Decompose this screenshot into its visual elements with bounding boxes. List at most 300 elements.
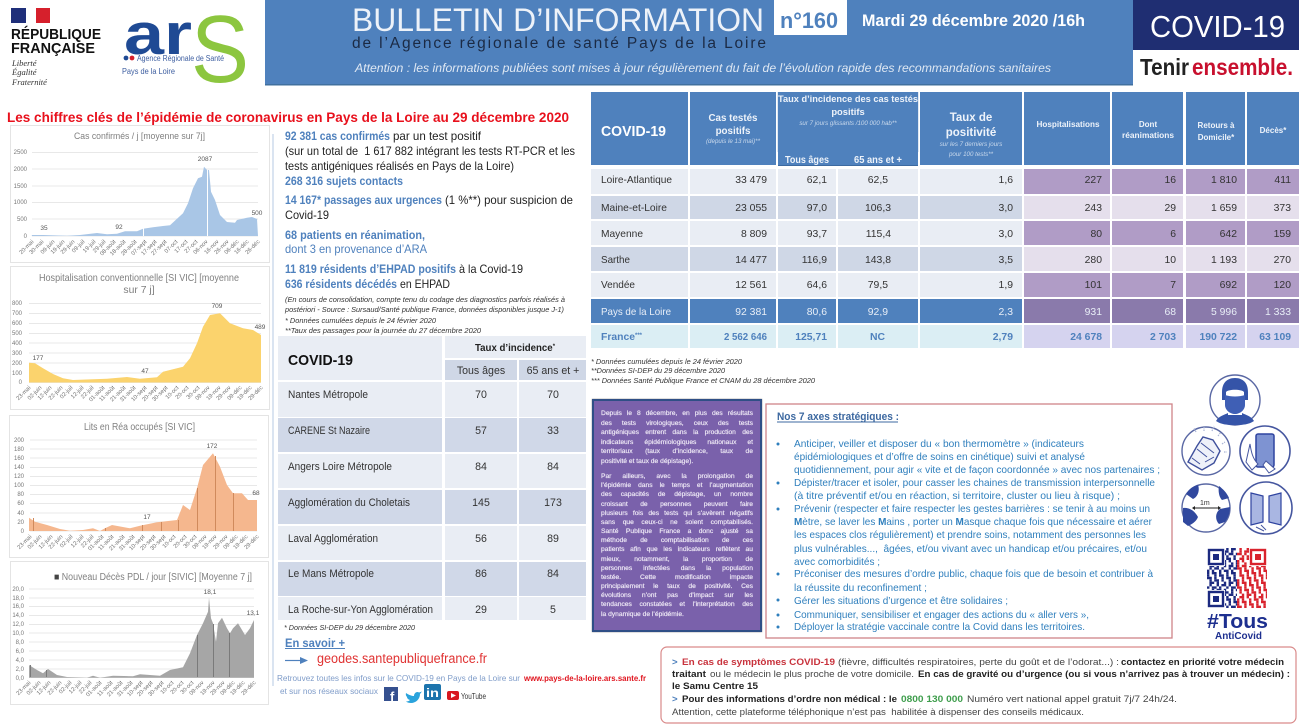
table header: positifs: [831, 106, 865, 117]
row: Mayenne: 8 809: [741, 229, 767, 240]
label: #TousAntiCovid: #Tous: [1207, 611, 1268, 633]
chart: lits en réa occupés: 02-juin: [27, 534, 43, 551]
icon: masque: [1210, 375, 1260, 425]
chart: lits en réa occupés: 200: [14, 438, 25, 444]
key figures text block: (1 %**) pour suspicion de: [445, 194, 573, 207]
chart: nouveaux décès: 0,0: [16, 676, 25, 682]
table: taux d'incidence par agglomération: 5: [550, 604, 556, 616]
chart: hospitalisation conventionnelle: 23-mai: [16, 385, 32, 402]
icon: téléphone: [1240, 426, 1290, 476]
chart: hospitalisation conventionnelle: 22-juin: [48, 385, 64, 402]
icons: réseaux sociaux: YouTube: [461, 691, 486, 701]
chart: nouveaux décès: 18,1: [204, 589, 217, 596]
chart: nouveaux décès: 10,0: [12, 631, 25, 637]
chart: lits en réa occupés: 20-sept: [139, 534, 158, 552]
header banner: BULLETIN D’INFORMATION: [352, 2, 764, 38]
table: taux d'incidence par agglomération: 65 ans et +: [527, 365, 579, 377]
table: taux d'incidence par agglomération: 145: [472, 497, 490, 509]
chart: hospitalisation conventionnelle: 10-oct: [165, 385, 181, 401]
row: Pays de la Loire: 2,3: [999, 307, 1013, 318]
table: taux d'incidence par agglomération: [278, 336, 586, 620]
row: Mayenne: 115,4: [866, 229, 891, 240]
chart: lits en réa occupés: 22-juil: [80, 534, 95, 549]
chart: hospitalisation conventionnelle: 22-juil: [80, 385, 95, 400]
row: Vendée: 101: [1085, 280, 1102, 291]
chart: nouveaux décès: 14,0: [12, 613, 25, 619]
chart: lits en réa occupés: 30-sept: [149, 534, 168, 552]
row: France: France: [601, 332, 635, 343]
chart: cas confirmés: 06-déc: [224, 239, 240, 256]
logo: République Française: [11, 8, 101, 87]
row: Sarthe: 143,8: [865, 255, 891, 266]
panel: note méthodologique violette: des tests virologiques, ceux des tests: [601, 420, 753, 426]
table: taux d'incidence par agglomération: Tous âges: [457, 365, 505, 377]
chart: cas confirmés: 500: [17, 217, 28, 223]
bullet list: Mètre, se laver les Mains , porter un Masque chaque fois que nécessaire et aérer: [794, 517, 1153, 528]
bullet list: (à titre préventif et/ou en réaction, si territoire, cluster ou lieu à risque) ;: [794, 491, 1120, 502]
chart: cas confirmés: 1000: [14, 200, 28, 206]
chart: nouveaux décès: 09-nov: [189, 680, 205, 697]
row: France: 190 722: [1199, 332, 1237, 343]
chart: lits en réa occupés: 22-juin: [48, 534, 64, 551]
row: Vendée: [601, 280, 1291, 291]
chart: hospitalisation conventionnelle: 11-août: [99, 385, 117, 403]
chart: nouveaux décès: 22-juin: [47, 680, 63, 697]
social links line: [277, 674, 646, 696]
panel: note méthodologique violette: croissant de personnes peuvent faire: [601, 500, 753, 508]
bullet list: [776, 439, 1160, 633]
chart: nouveaux décès: 22-juil: [78, 680, 93, 695]
table header: [591, 92, 1299, 166]
icon: distance 1 m: [1182, 484, 1230, 532]
chart: lits en réa occupés: 31-août: [118, 534, 137, 552]
table: taux d'incidence par agglomération: 84: [475, 461, 487, 473]
bullet list: la réussite du reconfinement ;: [794, 583, 927, 594]
key figures text block: (En cours de consolidation, compte tenu du codage des diagnostics parfois réalisés à: [285, 295, 565, 304]
logo: ARS Pays de la Loire: ar: [124, 2, 192, 67]
chart: lits en réa occupés: 160: [14, 456, 25, 462]
chart: lits en réa occupés: 30-oct: [183, 534, 199, 550]
header banner: [265, 0, 1133, 86]
row: Loire-Atlantique: 62,1: [807, 175, 827, 186]
panel: note méthodologique violette: Depuis le 8 décembre, en plus des résultats: [601, 410, 753, 417]
chart: cas confirmés: 2500: [14, 150, 28, 156]
table header: COVID-19: [601, 124, 666, 140]
chart: cas confirmés: 500: [252, 210, 263, 217]
panel: note méthodologique violette: sans que ceux-ci ne soient comptabilisés.: [601, 519, 753, 526]
link: en savoir plus: En savoir +: [285, 636, 345, 650]
row: Maine-et-Loire: 243: [1085, 203, 1102, 214]
table: taux d'incidence par agglomération: 70: [547, 389, 559, 401]
row: Pays de la Loire: 80,6: [807, 307, 827, 318]
row: Vendée: 64,6: [807, 280, 827, 291]
footnotes: main table: * Données cumulées depuis le 24 février 2020: [591, 357, 743, 366]
row: France: 2 703: [1150, 332, 1176, 343]
row: Sarthe: [601, 255, 1291, 266]
chart: cas confirmés: 16-nov: [204, 239, 220, 256]
row: Loire-Atlantique: 33 479: [735, 175, 767, 186]
chart: hospitalisation conventionnelle: 31-août: [119, 385, 138, 403]
chart: hospitalisation conventionnelle: 20-sept: [141, 385, 160, 403]
chart: lits en réa occupés: 01-août: [87, 534, 106, 552]
panel: que faire en cas de symptômes: Numéro vert national appel gratuit 7j/7 24h/24.: [967, 694, 1177, 705]
row: Pays de la Loire: 92 381: [735, 307, 767, 318]
panel: que faire en cas de symptômes: >: [672, 657, 678, 668]
key figures text block: Covid-19: [285, 209, 329, 222]
icons: réseaux sociaux: in: [426, 686, 439, 700]
chart: nouveaux décès: 20-oct: [170, 680, 186, 696]
chart: hospitalisation conventionnelle: 0: [19, 380, 23, 386]
chart: lits en réa occupés: 20: [17, 520, 25, 526]
chart: hospitalisation conventionnelle: 489: [255, 324, 266, 331]
social links line: et sur nos réseaux sociaux: [280, 687, 378, 696]
chart: cas confirmés: 09-juin: [40, 239, 56, 256]
panel: note méthodologique violette: tendances constatées et l’interprétation des: [601, 601, 753, 608]
row: Maine-et-Loire: 29: [1164, 203, 1176, 214]
chart: cas confirmés: 07-oct: [164, 239, 180, 255]
chart: cas confirmés: 1500: [14, 184, 28, 190]
link: en savoir plus: [285, 636, 487, 666]
row: Vendée: 692: [1220, 280, 1237, 291]
chart: nouveaux décès: 8,0: [16, 640, 25, 646]
badge: COVID-19 Tenir ensemble: Tenir: [1140, 54, 1189, 80]
badge: COVID-19 Tenir ensemble: COVID-19: [1150, 9, 1285, 44]
panel: note méthodologique violette: patients afin que les indicateurs reflètent au: [601, 546, 753, 553]
table header: sur les 7 derniers jours: [940, 141, 1002, 148]
bullet list: Prévenir (respecter et faire respecter les gestes barrières : se tenir à au moins un: [794, 504, 1150, 515]
chart: lits en réa occupés: 0: [21, 529, 25, 535]
chart: hospitalisation conventionnelle: 19-nov: [206, 385, 222, 402]
table header: Taux de: [950, 112, 992, 124]
table header: positifs: [716, 126, 751, 137]
icon: lavage des mains: [1182, 426, 1230, 475]
chart: nouveaux décès: 12,0: [12, 622, 25, 628]
link: en savoir plus: geodes.santepubliquefrance.fr: [317, 651, 487, 666]
chart: hospitalisation conventionnelle: 29-nov: [216, 385, 232, 402]
row: France: 125,71: [795, 332, 827, 343]
chart: lits en réa occupés: 12-juin: [38, 534, 54, 551]
chart: nouveaux décès: 19-nov: [200, 680, 216, 697]
chart: nouveaux décès: 18,0: [12, 596, 25, 602]
chart: cas confirmés: 08-août: [99, 239, 118, 257]
row: Vendée: 120: [1274, 280, 1291, 291]
chart: lits en réa occupés: 23-mai: [17, 534, 33, 551]
table: taux d'incidence par agglomération: Laval Agglomération: [288, 533, 378, 545]
row: Mayenne: 6: [1170, 229, 1176, 240]
logo: République Française: FRANÇAISE: [11, 40, 95, 57]
row: Vendée: 79,5: [868, 280, 888, 291]
chart: lits en réa occupés: [10, 416, 268, 558]
panel: note méthodologique violette: territoriaux (taux d’incidence, taux de: [601, 448, 753, 455]
panel: que faire en cas de symptômes: ou le médecin le plus proche de votre domicile.: [710, 669, 914, 680]
row: Loire-Atlantique: 1 810: [1211, 175, 1237, 186]
row: Maine-et-Loire: 1 659: [1211, 203, 1237, 214]
table header: réanimations: [1122, 131, 1175, 140]
chart: cas confirmés: 16-déc: [234, 239, 250, 256]
chart: cas confirmés: 29-juil: [92, 239, 107, 254]
chart: lits en réa occupés: 100: [14, 483, 25, 489]
chart: nouveaux décès: 21-août: [106, 680, 125, 698]
chart: hospitalisation conventionnelle: Hospitalisation conventionnelle [SI VIC] [moyenne: [39, 273, 239, 284]
panel: note méthodologique violette: testée. Cette modification impacte: [601, 574, 753, 581]
row: Vendée: 1,9: [999, 280, 1013, 291]
main heading: Les chiffres clés de l’épidémie de coronavirus en Pays de la Loire au 29 décembre 2020: [7, 110, 569, 125]
chart: hospitalisation conventionnelle: sur 7 j]: [123, 285, 155, 296]
key figures text block: dont 3 en provenance d’ARA: [285, 243, 427, 256]
row: Maine-et-Loire: 106,3: [865, 203, 891, 214]
row: Maine-et-Loire: 3,0: [999, 203, 1013, 214]
chart: nouveaux décès: ■ Nouveau Décès PDL / jour [SIVIC] [Moyenne 7 j]: [54, 572, 252, 583]
chart: hospitalisation conventionnelle: 12-juil: [70, 385, 85, 400]
table: taux d'incidence par agglomération: Le Mans Métropole: [288, 568, 374, 580]
icons: réseaux sociaux: [384, 684, 486, 704]
bullet list: les espaces clos régulièrement) et prendre soins, notamment des personnes les: [794, 530, 1146, 541]
chart: hospitalisation conventionnelle: 09-déc: [227, 385, 243, 402]
row: Sarthe: 14 477: [735, 255, 767, 266]
chart: lits en réa occupés: 02-juil: [59, 534, 74, 549]
chart: hospitalisation conventionnelle: 100: [12, 371, 23, 377]
panel: note méthodologique violette: indicateurs épidémiologiques nationaux et: [601, 438, 753, 446]
table: indicateurs par département: [591, 92, 1299, 348]
panel: que faire en cas de symptômes: En cas de symptômes COVID-19: [682, 657, 835, 668]
chart: hospitalisation conventionnelle: 29-déc: [248, 385, 264, 402]
key figures text block: [284, 130, 575, 335]
chart: lits en réa occupés: 29-nov: [213, 534, 229, 551]
chart: cas confirmés: 06-nov: [193, 239, 209, 256]
header banner: n°160: [780, 8, 838, 33]
key figures text block: 268 316 sujets contacts: [285, 175, 403, 188]
row: Loire-Atlantique: 16: [1164, 175, 1176, 186]
table: taux d'incidence par agglomération: 33: [547, 425, 559, 437]
row: Mayenne: 93,7: [807, 229, 827, 240]
chart: cas confirmés: 09-juil: [71, 239, 86, 254]
chart: nouveaux décès: 16,0: [12, 604, 25, 610]
key figures text block: à la Covid-19: [459, 263, 523, 276]
table header: sur 7 jours glissants /100 000 hab**: [799, 120, 897, 127]
chart: cas confirmés: 2087: [198, 156, 213, 163]
row: Sarthe: 1 193: [1211, 255, 1237, 266]
chart: nouveaux décès: 10-oct: [160, 680, 176, 696]
panel: 7 axes stratégiques: [766, 404, 1172, 638]
table: taux d'incidence par agglomération: 84: [547, 461, 559, 473]
footnotes: main table: [591, 357, 816, 385]
key figures text block: (sur un total de 1 617 882 intégrant les tests RT-PCR et les: [285, 145, 575, 158]
logo: ARS Pays de la Loire: Pays de la Loire: [122, 67, 176, 76]
icon: aérer: [1240, 482, 1292, 534]
key figures text block: par un test positif: [393, 130, 482, 143]
panel: note méthodologique violette: des capacités de dépistage, un nombre: [601, 491, 753, 498]
row: France: [601, 332, 1291, 343]
footnote: incidence table: * Données SI-DEP du 29 décembre 2020: [284, 623, 416, 632]
chart: cas confirmés: 30-mai: [29, 239, 45, 256]
chart: lits en réa occupés: 172: [207, 443, 218, 450]
key figures text block: 68 patients en réanimation,: [285, 229, 425, 242]
row: Pays de la Loire: 931: [1085, 307, 1102, 318]
header banner: de l’Agence régionale de santé Pays de la Loire: [352, 35, 766, 52]
row: Mayenne: 80: [1090, 229, 1102, 240]
row: Sarthe: Sarthe: [601, 255, 630, 266]
chart: lits en réa occupés: 19-déc: [233, 534, 249, 551]
chart: hospitalisation conventionnelle: 47: [141, 368, 149, 375]
chart: hospitalisation conventionnelle: 20-oct: [175, 385, 191, 401]
row: Maine-et-Loire: 97,0: [807, 203, 827, 214]
chart: cas confirmés: 17-oct: [174, 239, 190, 255]
table: taux d'incidence par agglomération: 173: [544, 497, 562, 509]
chart: hospitalisation conventionnelle: 30-oct: [186, 385, 202, 401]
panel: que faire en cas de symptômes: 0800 130 000: [901, 694, 963, 705]
bullet list: quotidiennement, pour agir « vite et de façon coordonnée » avec nos partenaires ;: [794, 465, 1160, 476]
chart: cas confirmés: 2000: [14, 167, 28, 173]
chart: nouveaux décès: 4,0: [16, 658, 25, 664]
row: Mayenne: 3,0: [999, 229, 1013, 240]
chart: cas confirmés: 28-août: [120, 239, 139, 257]
chart: cas confirmés: 29-juin: [60, 239, 76, 256]
chart: cas confirmés: [10, 126, 270, 262]
chart: nouveaux décès: 30-oct: [180, 680, 196, 696]
chart: hospitalisation conventionnelle: 30-sept: [151, 385, 170, 403]
panel: note méthodologique violette: plusieurs fois des tests qui s’avèrent négatifs: [601, 510, 753, 517]
panel: que faire en cas de symptômes: [661, 647, 1296, 723]
table header: Cas testés: [708, 113, 758, 124]
row: Loire-Atlantique: 411: [1274, 175, 1291, 186]
header banner: Attention : les informations publiées sont mises à jour régulièrement du fait de l’évolution rapide des recommandations sanitaires: [354, 63, 1051, 75]
logo: République Française: Fraternité: [11, 77, 48, 87]
key figures text block: **Taux des passages pour la journée du 27 décembre 2020: [285, 326, 482, 335]
logo: République Française: RÉPUBLIQUE: [11, 26, 101, 43]
panel: note méthodologique violette: la dynamique de l’épidémie.: [601, 610, 684, 618]
row: Maine-et-Loire: [601, 203, 1291, 214]
chart: nouveaux décès: 29-nov: [210, 680, 226, 697]
row: Mayenne: Mayenne: [601, 229, 643, 240]
chart: lits en réa occupés: 17: [143, 514, 151, 521]
chart: cas confirmés: 0: [24, 234, 28, 240]
row: France: 24 678: [1070, 332, 1102, 343]
panel: que faire en cas de symptômes: contactez en priorité votre médecin: [1121, 657, 1284, 668]
key figures text block: en EHPAD: [400, 278, 450, 291]
footnotes: main table: *** Données Santé Publique France et CNAM du 28 décembre 2020: [591, 376, 816, 385]
badge: COVID-19 Tenir ensemble: [1133, 0, 1299, 80]
key figures text block: * Données cumulées depuis le 24 février 2020: [285, 316, 437, 325]
table: taux d'incidence par agglomération: Taux d’incidence: [475, 343, 554, 354]
row: Pays de la Loire: [601, 307, 1291, 318]
table header: Dont: [1139, 120, 1157, 129]
chart: cas confirmés: 07-sept: [130, 239, 149, 257]
row: France: NC: [870, 332, 885, 343]
chart: lits en réa occupés: 09-nov: [192, 534, 208, 551]
chart: cas confirmés: 19-juin: [50, 239, 66, 256]
chart: hospitalisation conventionnelle: 09-nov: [195, 385, 211, 402]
table: taux d'incidence par agglomération: 86: [475, 568, 487, 580]
chart: lits en réa occupés: 21-août: [108, 534, 127, 552]
table: taux d'incidence par agglomération: 84: [547, 568, 559, 580]
table header: Taux d’incidence des cas testés: [778, 93, 918, 104]
chart: cas confirmés: 26-nov: [214, 239, 230, 256]
table header: 65 ans et +: [854, 155, 902, 166]
chart: nouveaux décès: [10, 562, 268, 704]
logo: ARS Pays de la Loire: Agence Régionale de Santé: [137, 54, 224, 63]
row: Pays de la Loire: Pays de la Loire: [601, 307, 671, 318]
table: taux d'incidence par agglomération: 56: [475, 533, 487, 545]
chart: lits en réa occupés: 80: [17, 492, 25, 498]
table rows backgrounds: [591, 169, 1299, 348]
chart: lits en réa occupés: Lits en Réa occupés [SI VIC]: [84, 422, 195, 433]
chart: cas confirmés: 17-sept: [140, 239, 159, 257]
chart: cas confirmés: 18-août: [109, 239, 128, 257]
chart: lits en réa occupés: 120: [14, 474, 25, 480]
chart: nouveaux décès: 23-mai: [16, 680, 32, 697]
table: taux d'incidence par agglomération: CARENE St Nazaire: [288, 425, 370, 437]
chart: nouveaux décès: 20-sept: [136, 680, 155, 698]
chart: hospitalisation conventionnelle: 02-juil: [59, 385, 74, 400]
table header: (depuis le 13 mai)**: [706, 138, 761, 145]
row: Maine-et-Loire: 23 055: [735, 203, 767, 214]
chart: cas confirmés: Cas confirmés / j [moyenne sur 7j]: [74, 131, 205, 142]
bullet list: avec comorbidités ;: [794, 557, 880, 568]
chart: nouveaux décès: 29-déc: [241, 680, 257, 697]
bullet list: Gérer les situations d’urgence et être solidaires ;: [794, 596, 1008, 607]
chart: hospitalisation conventionnelle: 01-août: [88, 385, 107, 403]
chart: hospitalisation conventionnelle: 600: [12, 321, 23, 327]
chart: nouveaux décès: 01-août: [85, 680, 104, 698]
panel: que faire en cas de symptômes: traitant: [672, 669, 707, 680]
panel: note méthodologique violette: Par ailleurs, avec la prolongation de: [601, 473, 753, 480]
chart: cas confirmés: 27-oct: [184, 239, 200, 255]
table header: Hospitalisations: [1036, 120, 1100, 129]
key figures text block: postériori - Source : Sursaud/Santé publique France, données disponibles jusque J-1): [284, 305, 565, 314]
chart: lits en réa occupés: 40: [17, 511, 25, 517]
row: Mayenne: 642: [1220, 229, 1237, 240]
panel: note méthodologique violette: [592, 399, 762, 632]
panel: note méthodologique violette: Santé Publique France a donc ajusté sa: [601, 528, 753, 535]
label: #TousAntiCovid: [1207, 611, 1268, 642]
social links line: www.pays-de-la-loire.ars.sante.fr: [523, 674, 646, 683]
chart: nouveaux décès: 2,0: [16, 667, 25, 673]
chart: cas confirmés: 19-juil: [82, 239, 97, 254]
row: Maine-et-Loire: Maine-et-Loire: [601, 203, 667, 214]
chart: hospitalisation conventionnelle: 500: [12, 331, 23, 337]
QR code: [1207, 548, 1267, 608]
row: Pays de la Loire: 68: [1164, 307, 1176, 318]
chart: nouveaux décès: 20,0: [12, 587, 25, 593]
bullet list: épidémiologiques et d’offre de soins en cinétique) suivi et analysé: [794, 452, 1085, 463]
table: taux d'incidence par agglomération: 89: [547, 533, 559, 545]
panel: que faire en cas de symptômes: le Samu Centre 15: [672, 681, 759, 692]
key figures text block: tests antigéniques réalisés en Pays de la Loire): [285, 160, 514, 173]
table: taux d'incidence par agglomération: Agglomération du Choletais: [288, 497, 410, 509]
bullet list: Préconiser des mesures d’ordre public, chaque fois que de besoin et contribuer à: [794, 569, 1153, 580]
panel: note méthodologique violette: méthode de comptabilisation de ces: [601, 537, 753, 544]
chart: cas confirmés: 92: [115, 224, 123, 231]
chart: hospitalisation conventionnelle: 02-juin: [27, 385, 43, 402]
key figures text block: 92 381 cas confirmés: [285, 130, 390, 143]
chart: nouveaux décès: 12-juin: [36, 680, 52, 697]
chart: hospitalisation conventionnelle: 709: [212, 303, 223, 310]
social links line: Retrouvez toutes les infos sur le COVID-19 en Pays de la Loire sur: [277, 674, 520, 683]
row: Maine-et-Loire: 373: [1274, 203, 1291, 214]
table: taux d'incidence par agglomération: 70: [475, 389, 487, 401]
row: Loire-Atlantique: 227: [1085, 175, 1102, 186]
table: taux d'incidence par agglomération: 29: [475, 604, 487, 616]
row: Loire-Atlantique: Loire-Atlantique: [601, 175, 672, 186]
chart: nouveaux décès: 13,1: [247, 610, 260, 617]
table: taux d'incidence par agglomération: La Roche-sur-Yon Agglomération: [288, 604, 433, 616]
chart: hospitalisation conventionnelle: 12-juin: [37, 385, 53, 402]
table header: Décès*: [1260, 126, 1287, 135]
chart: lits en réa occupés: 68: [252, 490, 260, 497]
chart: hospitalisation conventionnelle: 19-déc: [237, 385, 253, 402]
panel: note méthodologique violette: mieux, notamment, la proportion de: [601, 556, 753, 562]
chart: hospitalisation conventionnelle: 300: [12, 351, 23, 357]
